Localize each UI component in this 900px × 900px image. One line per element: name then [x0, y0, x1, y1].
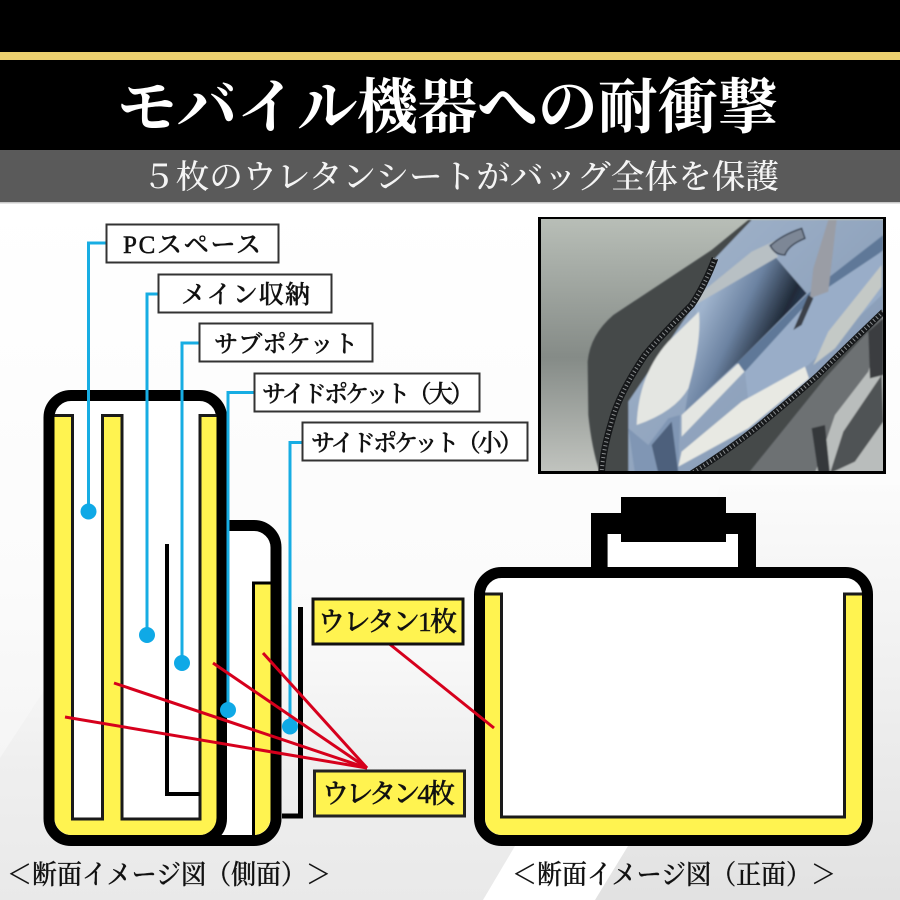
label: sub pocket: サブポケット [214, 332, 358, 358]
urethane sheets U-shape [54, 416, 216, 835]
callout: urethane 4 sheets [314, 771, 464, 816]
background [0, 202, 900, 900]
label: side pocket large: サイドポケット（大） [262, 381, 474, 408]
bag body [480, 572, 868, 840]
label: PC space: PCスペース [123, 232, 261, 259]
label: main storage: メイン収納 [181, 281, 310, 309]
side compartment shell [200, 526, 276, 840]
side pocket small divider [282, 607, 300, 816]
urethane callout lines [65, 642, 494, 768]
subtitle band [0, 150, 900, 204]
caption: side view: ＜断面イメージ図（側面）＞ [7, 860, 331, 890]
handle grip [621, 497, 726, 542]
header band [0, 0, 900, 150]
callout: urethane 1 sheet [313, 599, 463, 644]
label: sub pocket [200, 324, 372, 362]
urethane sheet [485, 594, 862, 835]
label: PC space [106, 224, 278, 262]
label: side pocket small: サイドポケット（小） [311, 430, 523, 457]
inner pocket divider [167, 544, 200, 794]
handle [591, 497, 756, 570]
label: side pocket small [302, 422, 528, 460]
callout: urethane 1 sheet: ウレタン1枚 [318, 607, 457, 637]
leader: side pocket small [282, 442, 302, 734]
label: main storage [158, 274, 332, 312]
leader: PC space [80, 243, 106, 520]
gold stripe [0, 52, 900, 60]
subtitle: ５枚のウレタンシートがバッグ全体を保護 [142, 159, 779, 196]
title: モバイル機器への耐衝撃 [117, 75, 778, 141]
side view cross-section [49, 396, 300, 840]
leader: main storage [139, 294, 158, 643]
leader: side pocket large [220, 392, 255, 718]
label: side pocket large [254, 374, 480, 412]
main compartment shell [49, 396, 222, 840]
photo: bag interior with urethane sheets [538, 217, 886, 474]
front view cross-section [480, 497, 868, 840]
leader: sub pocket [174, 343, 199, 671]
callout: urethane 4 sheets: ウレタン4枚 [322, 779, 455, 809]
caption: front view: ＜断面イメージ図（正面）＞ [512, 860, 836, 890]
